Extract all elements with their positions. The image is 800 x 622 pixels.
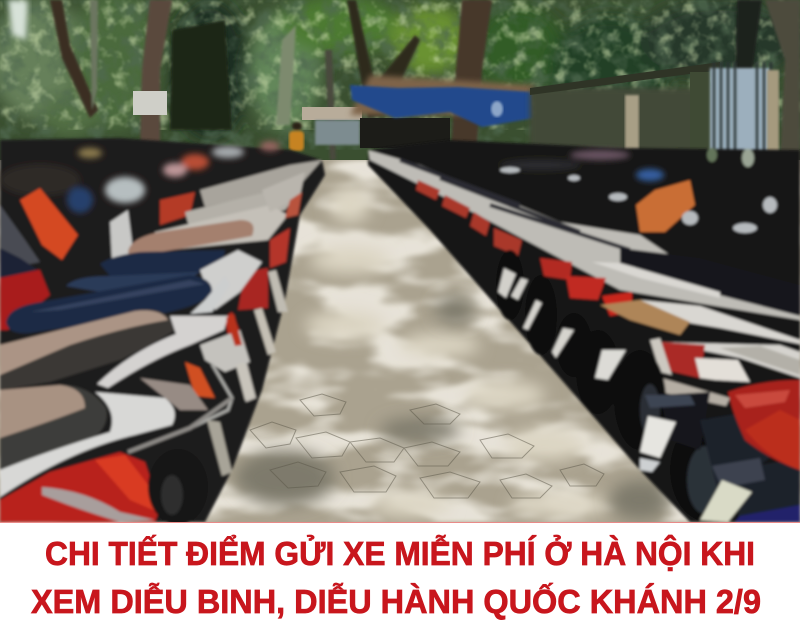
title line 1: CHI TIẾT ĐIỂM GỬI XE MIỄN PHÍ Ở HÀ NỘI KHI bbox=[45, 534, 755, 572]
background: trees and foliage bbox=[0, 0, 800, 172]
white scooter trim bbox=[592, 262, 720, 298]
person bbox=[289, 122, 304, 151]
near scooter seat bbox=[0, 385, 107, 478]
paved walkway bbox=[0, 160, 800, 522]
rear lights and plates of far scooters bbox=[200, 172, 305, 402]
title line 2: XEM DIỄU BINH, DIỄU HÀNH QUỐC KHÁNH 2/9 bbox=[31, 582, 761, 620]
divider line bbox=[0, 522, 800, 523]
near wheel and plate bbox=[146, 474, 191, 522]
sign bbox=[133, 91, 167, 115]
large red tail light bbox=[728, 380, 800, 470]
far scooter seats bbox=[66, 160, 322, 292]
title bbox=[31, 534, 761, 620]
left row of parked motorbikes bbox=[0, 138, 325, 525]
blue scooter seat bbox=[6, 275, 212, 333]
rear wheels bbox=[496, 250, 524, 320]
license plates bbox=[498, 268, 516, 298]
building and fence bbox=[302, 107, 362, 120]
right row of parked motorbikes bbox=[368, 140, 800, 522]
near red body and tail light bbox=[0, 452, 160, 522]
row of long seats with sun stripes bbox=[368, 150, 800, 320]
brown scooter seat bbox=[0, 310, 175, 390]
tree trunks bbox=[50, 0, 800, 172]
red tail lights along the row bbox=[416, 180, 632, 316]
